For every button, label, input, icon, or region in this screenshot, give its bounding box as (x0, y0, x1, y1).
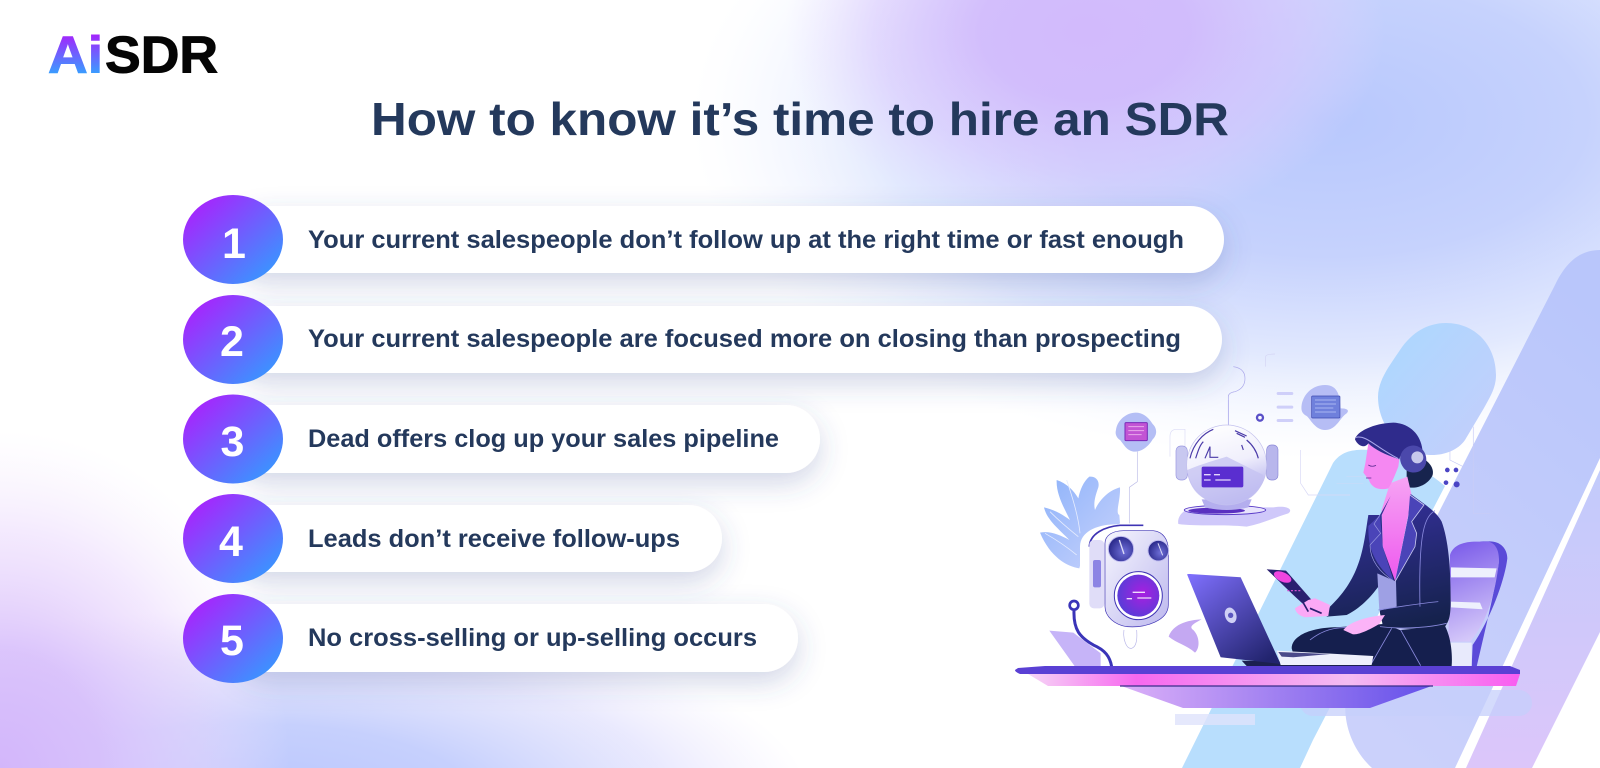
item 1: Your current salespeople don’t follow up at the right time or fast enough (308, 226, 1184, 254)
item 2 (183, 295, 1222, 384)
plant (1040, 477, 1120, 568)
numbered list (183, 195, 1224, 683)
item 1: 1 (222, 220, 246, 268)
dots near woman (1444, 468, 1460, 487)
desk (1015, 666, 1520, 708)
item 4: 4 (219, 518, 243, 566)
item 3: 3 (221, 418, 244, 466)
item 4: Leads don’t receive follow-ups (308, 525, 680, 553)
item 3 (183, 394, 820, 484)
icon: floating document right (1301, 385, 1348, 430)
helmet robot (1176, 400, 1290, 527)
chair (1448, 541, 1507, 667)
item 3: Dead offers clog up your sales pipeline (308, 425, 779, 453)
illustration: robots, laptop and woman at desk (1015, 354, 1520, 708)
title: How to know it’s time to hire an SDR (371, 93, 1229, 145)
purple shapes beside robot (1049, 619, 1202, 667)
woman (1292, 423, 1452, 666)
hand on lap (1343, 615, 1385, 634)
phone (1267, 569, 1330, 617)
legs (1292, 624, 1452, 666)
item 2: Your current salespeople are focused more on closing than prospecting (308, 325, 1181, 353)
decorative diagonal bars (1175, 250, 1600, 768)
item 5 (183, 594, 798, 683)
item 4 (183, 494, 722, 583)
logo (48, 26, 218, 84)
icon: floating document left (1116, 413, 1156, 523)
laptop (1187, 574, 1373, 666)
item 1 (183, 195, 1224, 284)
circuit lines and floating dashes (1170, 354, 1490, 513)
logo: SDR (105, 26, 218, 84)
item 5: No cross-selling or up-selling occurs (308, 624, 757, 652)
item 5: 5 (220, 617, 244, 665)
dial robot (1070, 524, 1169, 667)
item 2: 2 (220, 318, 244, 366)
jacket (1327, 494, 1451, 629)
logo: Ai (48, 26, 103, 84)
